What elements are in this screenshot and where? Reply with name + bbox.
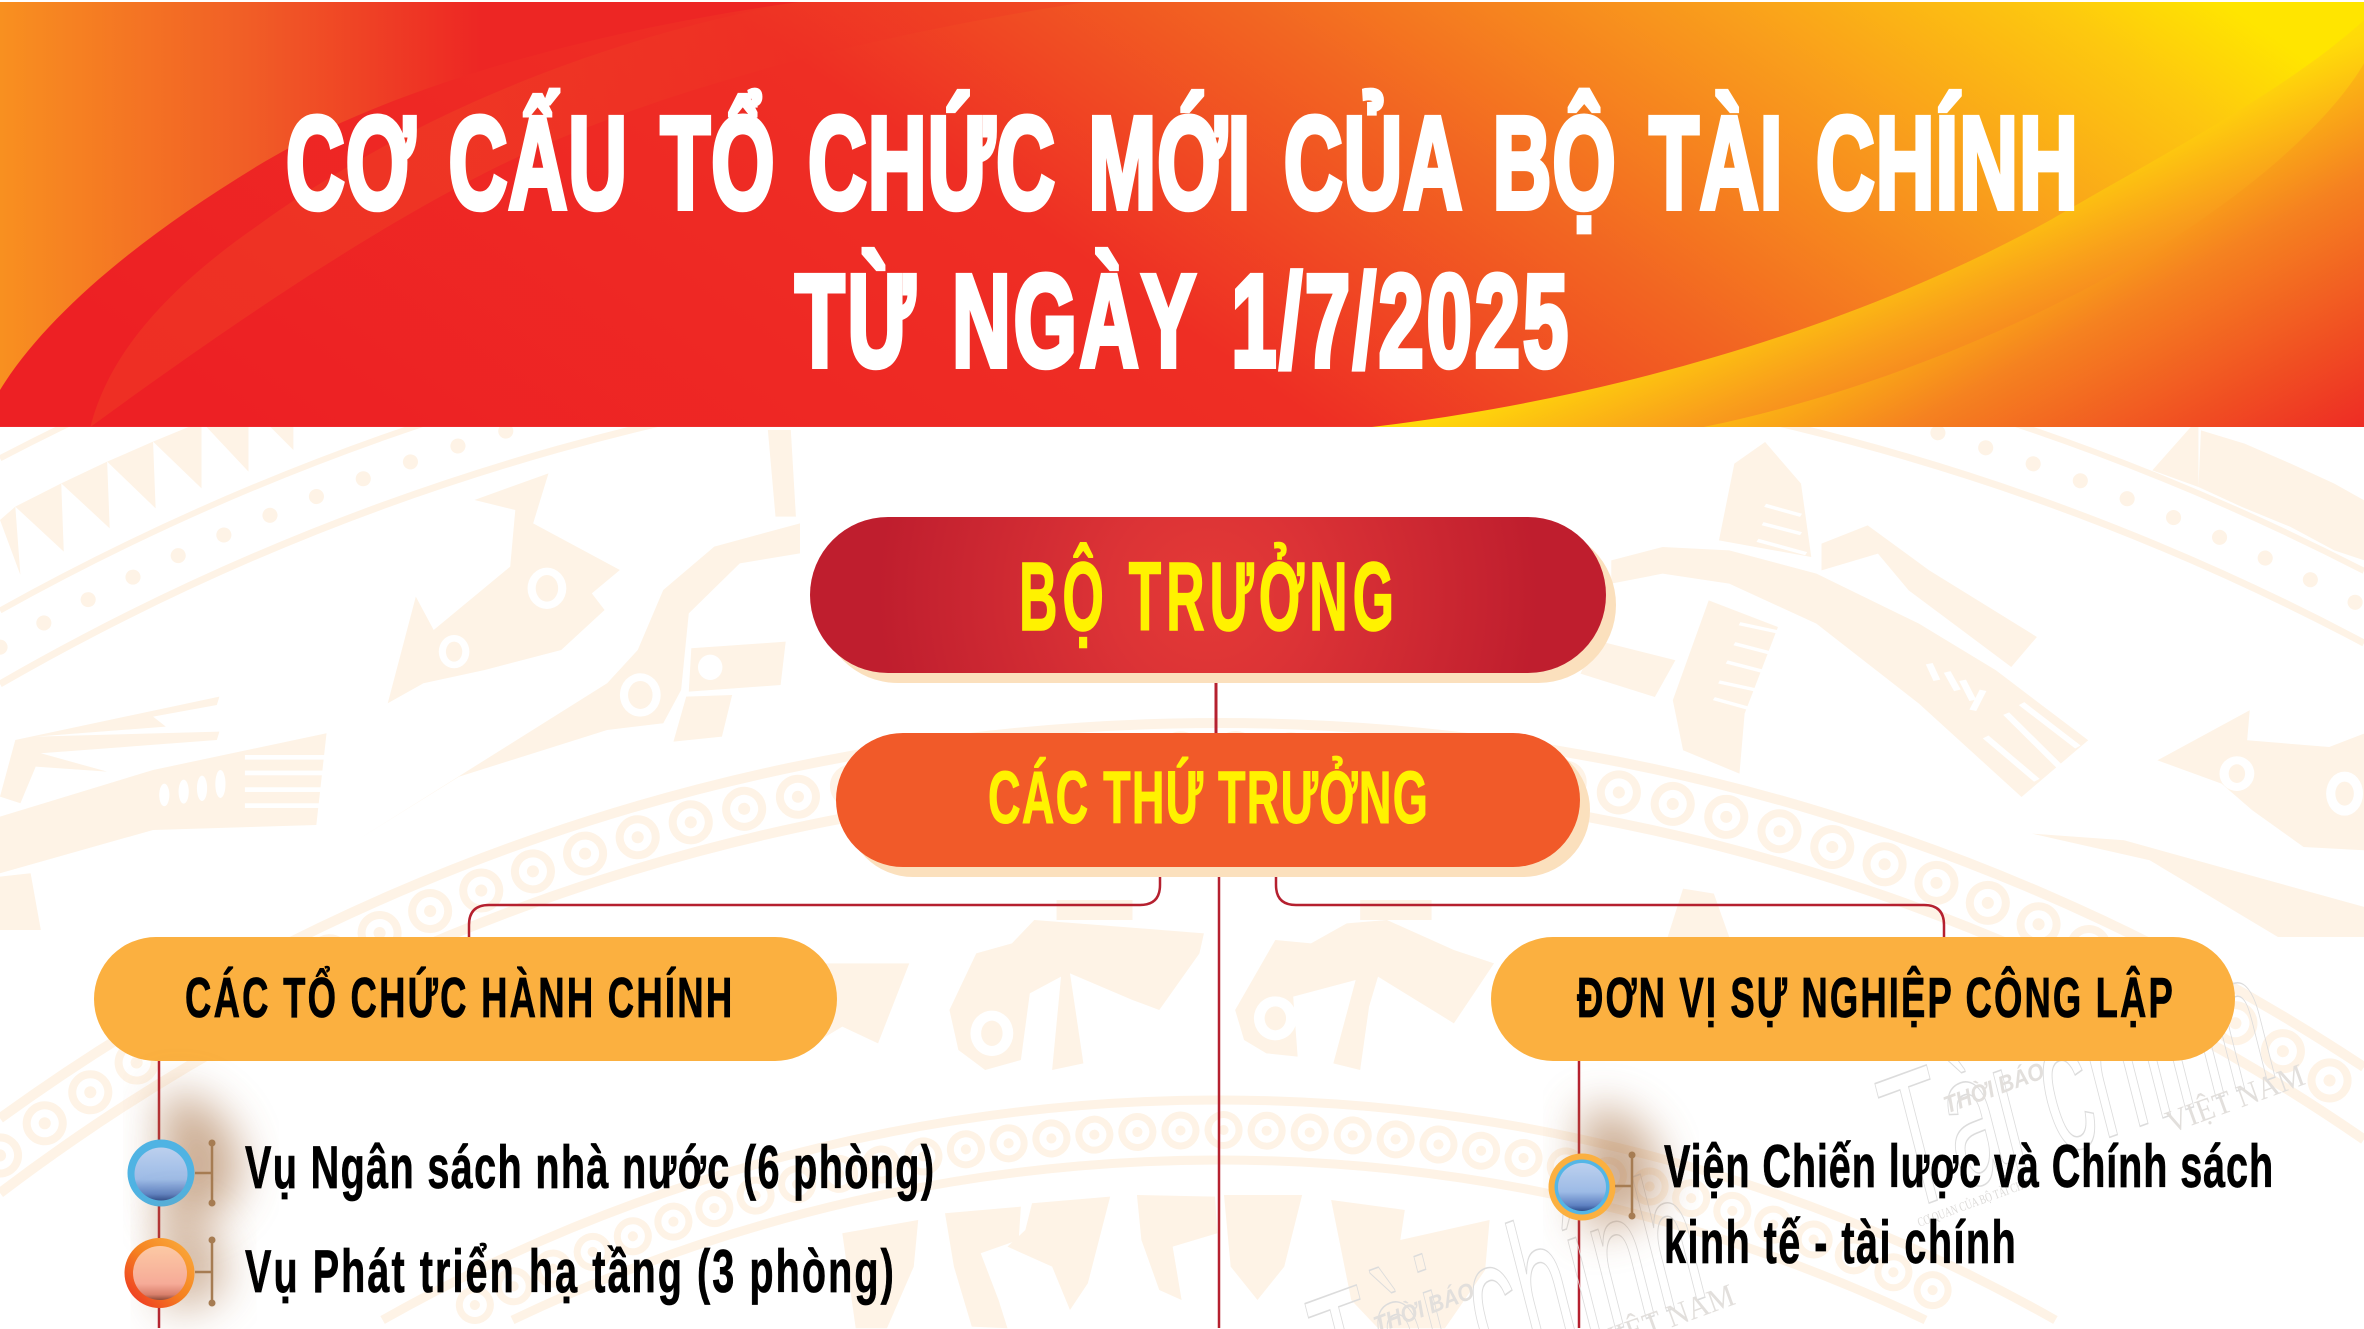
title: TỪ NGÀY 1/7/2025 xyxy=(795,248,1568,395)
icon: blue bullet xyxy=(128,1140,194,1206)
pill: Các tổ chức hành chính: CÁC TỔ CHỨC HÀNH CHÍNH xyxy=(185,965,732,1030)
pill: Đơn vị sự nghiệp công lập: ĐƠN VỊ SỰ NGHIỆP CÔNG LẬP xyxy=(1577,965,2173,1030)
pill: Các thứ trưởng: CÁC THỨ TRƯỞNG xyxy=(988,757,1428,839)
watermark: Thời báo Tài chính Việt Nam (upper) xyxy=(1852,907,2315,1249)
icon: orange bullet xyxy=(124,1238,194,1308)
pill: Các tổ chức hành chính xyxy=(94,937,837,1061)
pill: Bộ trưởng: BỘ TRƯỞNG xyxy=(1019,542,1394,651)
list item: Viện Chiến lược và Chính sách kinh tế - tài chính: kinh tế - tài chính xyxy=(1664,1209,2016,1276)
title: CƠ CẤU TỔ CHỨC MỚI CỦA BỘ TÀI CHÍNH xyxy=(286,89,2078,237)
list item: Viện Chiến lược và Chính sách kinh tế - tài chính: Viện Chiến lược và Chính sách xyxy=(1664,1133,2273,1200)
list item: Vụ Ngân sách nhà nước: Vụ Ngân sách nhà nước (6 phòng) xyxy=(245,1134,934,1201)
list item: Viện Chiến lược và Chính sách kinh tế - tài chính xyxy=(1548,1108,2273,1276)
pill: Bộ trưởng xyxy=(810,517,1616,683)
connectors: org chart lines xyxy=(159,673,1944,1328)
pill: Đơn vị sự nghiệp công lập xyxy=(1491,937,2235,1061)
watermark: Thời báo Tài chính Việt Nam (upper): CƠ QUAN CỦA BỘ TÀI CHÍNH xyxy=(1915,1172,2041,1230)
pill: Các thứ trưởng xyxy=(836,733,1590,877)
header banner xyxy=(0,2,2364,427)
list item: Vụ Phát triển hạ tầng xyxy=(124,1214,894,1310)
watermark: Thời báo Tài chính Việt Nam (lower, cropped by frame) xyxy=(1282,1127,1745,1329)
icon: amber bullet xyxy=(1548,1154,1616,1220)
watermark: Thời báo Tài chính Việt Nam (upper): THỜI BÁO xyxy=(1940,1057,2048,1119)
watermark: Thời báo Tài chính Việt Nam (upper): VIỆT NAM xyxy=(2161,1056,2309,1140)
list item: Vụ Ngân sách nhà nước xyxy=(128,1093,934,1225)
list item: Vụ Phát triển hạ tầng: Vụ Phát triển hạ tầng (3 phòng) xyxy=(245,1238,894,1305)
title xyxy=(286,89,2078,395)
